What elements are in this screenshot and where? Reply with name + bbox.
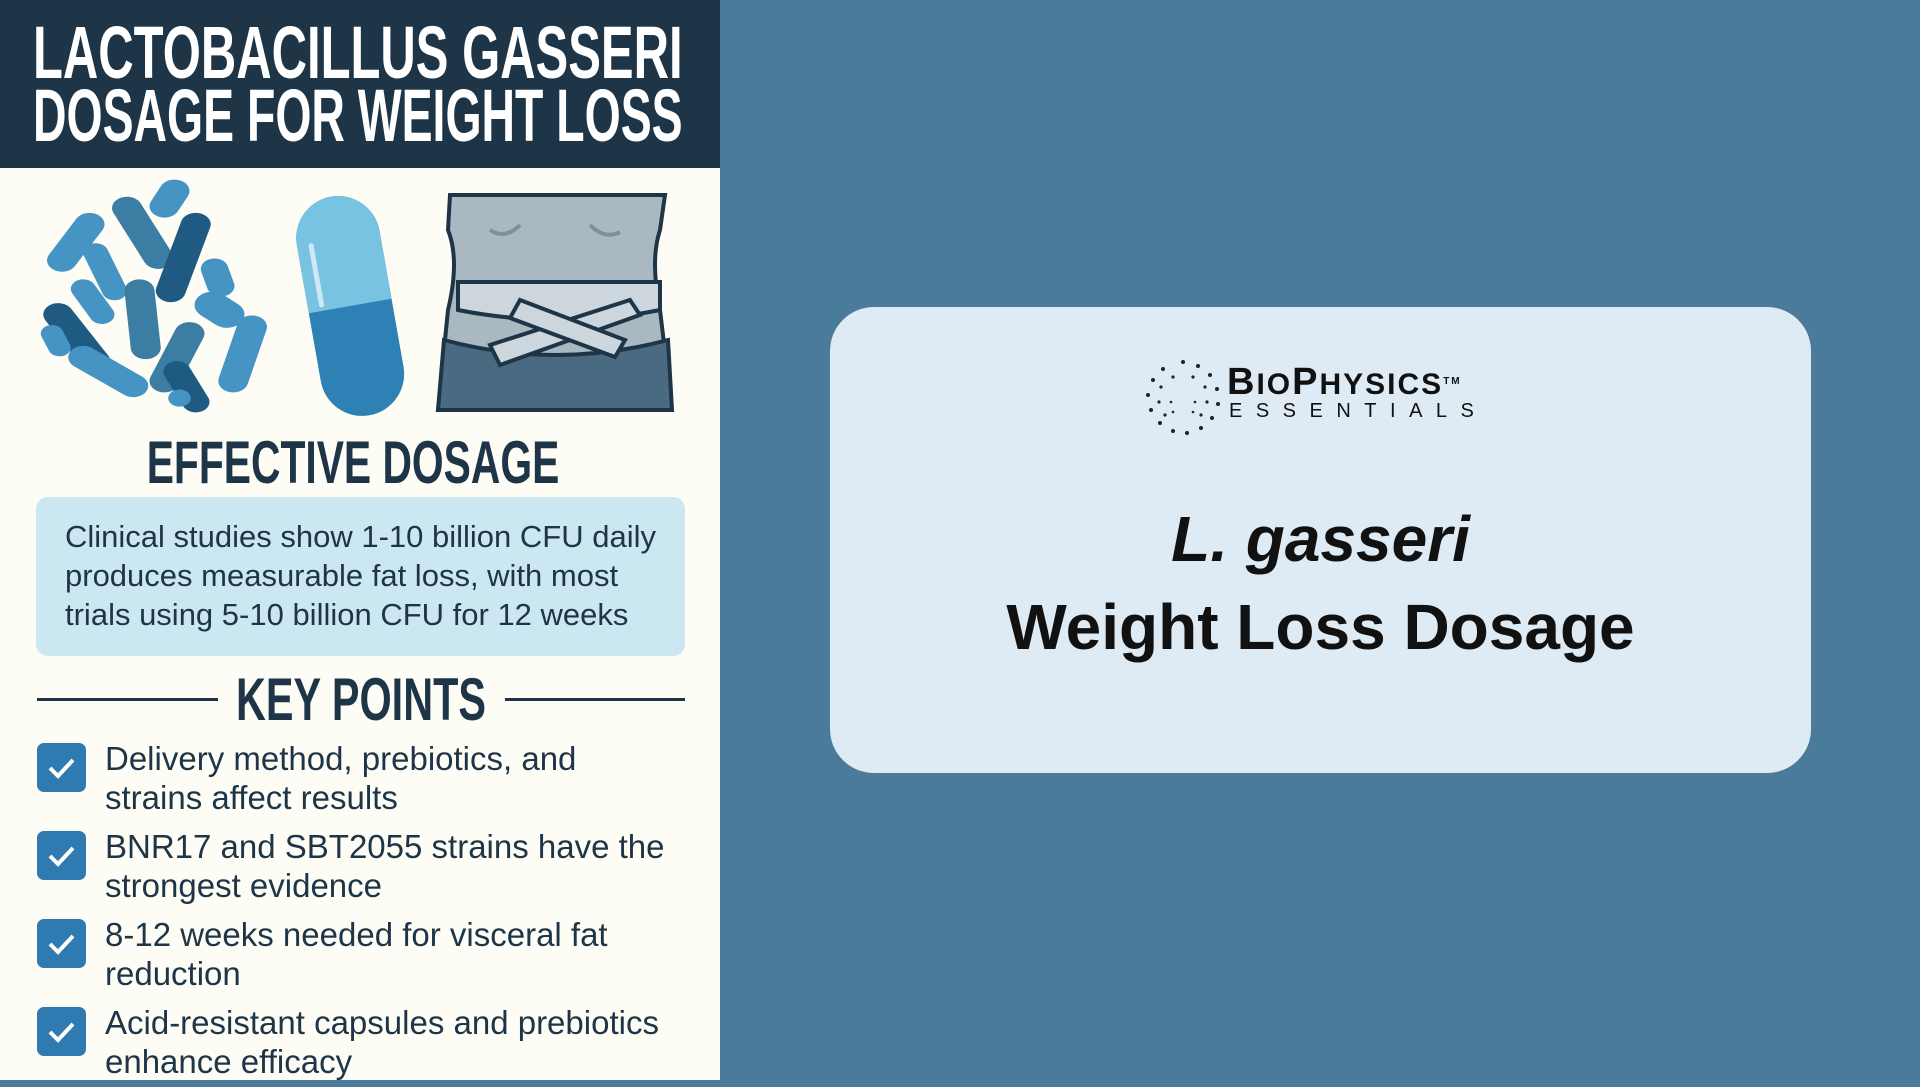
title: DOSAGE FOR WEIGHT LOSS: [33, 74, 683, 157]
key point 4: Acid-resistant capsules and prebiotics: [105, 1004, 659, 1041]
title: LACTOBACILLUS GASSERI: [33, 11, 683, 94]
title card: [830, 307, 1811, 773]
key point 3: 8-12 weeks needed for visceral fat: [105, 916, 608, 953]
title: [0, 0, 720, 168]
icon: waist with tape: [438, 195, 672, 410]
heading: weight loss dosage: Weight Loss Dosage: [1006, 591, 1635, 663]
key point 2: strongest evidence: [105, 867, 382, 904]
key point 1: Delivery method, prebiotics, and: [105, 740, 576, 777]
illustrations: [40, 180, 674, 416]
heading: effective dosage: EFFECTIVE DOSAGE: [147, 429, 559, 496]
logo: ESSENTIALS: [1229, 400, 1487, 422]
icon: capsule: [290, 189, 411, 423]
left panel: [0, 0, 720, 1080]
logo: [1146, 360, 1487, 435]
heading: L. gasseri: L. gasseri: [1171, 503, 1470, 575]
key point 3: reduction: [105, 955, 241, 992]
heading: key points: [37, 666, 685, 733]
key point 2: [37, 828, 665, 904]
key point 4: [37, 1004, 659, 1080]
key point 2: BNR17 and SBT2055 strains have the: [105, 828, 665, 865]
callout: dosage summary: produces measurable fat loss, with most: [65, 558, 618, 593]
key point 4: enhance efficacy: [105, 1043, 352, 1080]
icon: bacteria: [52, 191, 252, 407]
callout: dosage summary: trials using 5-10 billion CFU for 12 weeks: [65, 597, 628, 632]
key point 1: strains affect results: [105, 779, 398, 816]
callout: dosage summary: [36, 497, 685, 656]
key point 3: [37, 916, 608, 992]
logo: BIOPHYSICSTM: [1227, 361, 1462, 403]
callout: dosage summary: Clinical studies show 1-10 billion CFU daily: [65, 519, 656, 554]
heading: key points: KEY POINTS: [236, 666, 486, 733]
key point 1: [37, 740, 576, 816]
